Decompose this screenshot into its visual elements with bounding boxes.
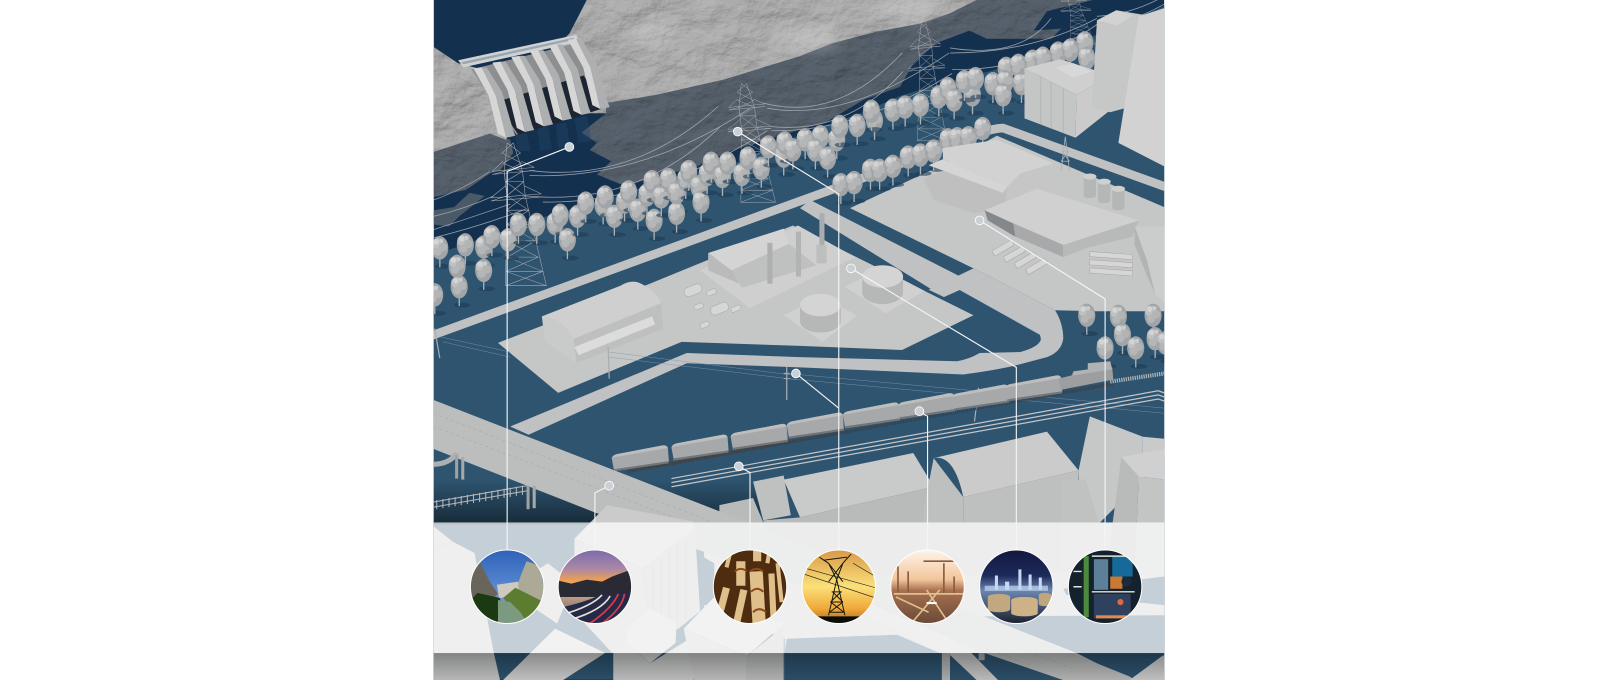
photo: highway light trails [558,550,632,623]
photo: dam in gorge [470,550,544,623]
marker dots [565,127,984,490]
leader: railway [919,411,928,551]
transmission wires [434,0,1164,238]
small process units [683,283,742,329]
mountain highlights [627,1,944,51]
pale ground slab under the strip [704,522,1164,680]
photo: pipelines [713,549,787,624]
trees [426,31,1177,369]
highway pillars and fence [434,453,536,509]
east factory complex [923,137,1164,302]
map illustration [426,0,1177,680]
storage tanks [784,265,924,342]
freight train [612,361,1113,471]
office block [1024,59,1111,138]
central plant plaza [498,226,973,393]
leader: pipeline [739,466,750,551]
parked trucks [992,240,1133,276]
power transmission towers [485,0,1098,286]
blue ground [434,6,1164,680]
shadow band below strip [434,653,1164,680]
looping road [510,277,1063,435]
tall towers [1092,8,1164,166]
gas power plant [700,213,855,308]
darkening under highway [434,486,760,524]
leader: dam [507,147,569,551]
leader: factory [980,220,1105,551]
corner road fragment [1130,655,1164,680]
translucent photo strip [434,522,1164,653]
railway tracks [628,373,1164,487]
night sky and river backdrop [434,0,1164,680]
dam spillway reflection [515,116,592,151]
hydro dam [458,35,610,138]
leader: utility pole [796,373,839,408]
road network [429,128,1173,435]
photo: rail yard [891,550,964,623]
flyover branch [948,653,998,680]
lower warehouse row [719,416,1164,577]
cross road [929,268,990,297]
photo: transmission tower at sunset [802,550,876,623]
photo: aerial plant at night [1068,550,1142,623]
photo: refinery at night [980,550,1053,623]
plant access road [800,200,990,297]
leader lines [507,132,1105,551]
infographic scene [434,0,1164,680]
mountain, lit rock face [434,0,977,152]
east plant plot [850,136,1164,311]
leader: highway [595,486,609,551]
foreground city blocks [434,505,784,680]
elevated highway [434,400,1135,680]
arched warehouse [542,282,661,355]
flyover pillars [942,653,985,680]
main perimeter road [429,128,1173,337]
utility poles and faint wires [435,329,1164,421]
leader: power lines [738,132,839,551]
blue ground pockets [700,555,1164,680]
leader: refinery tanks [851,268,1016,551]
mountain, shadowed rock above the river [434,0,1093,227]
